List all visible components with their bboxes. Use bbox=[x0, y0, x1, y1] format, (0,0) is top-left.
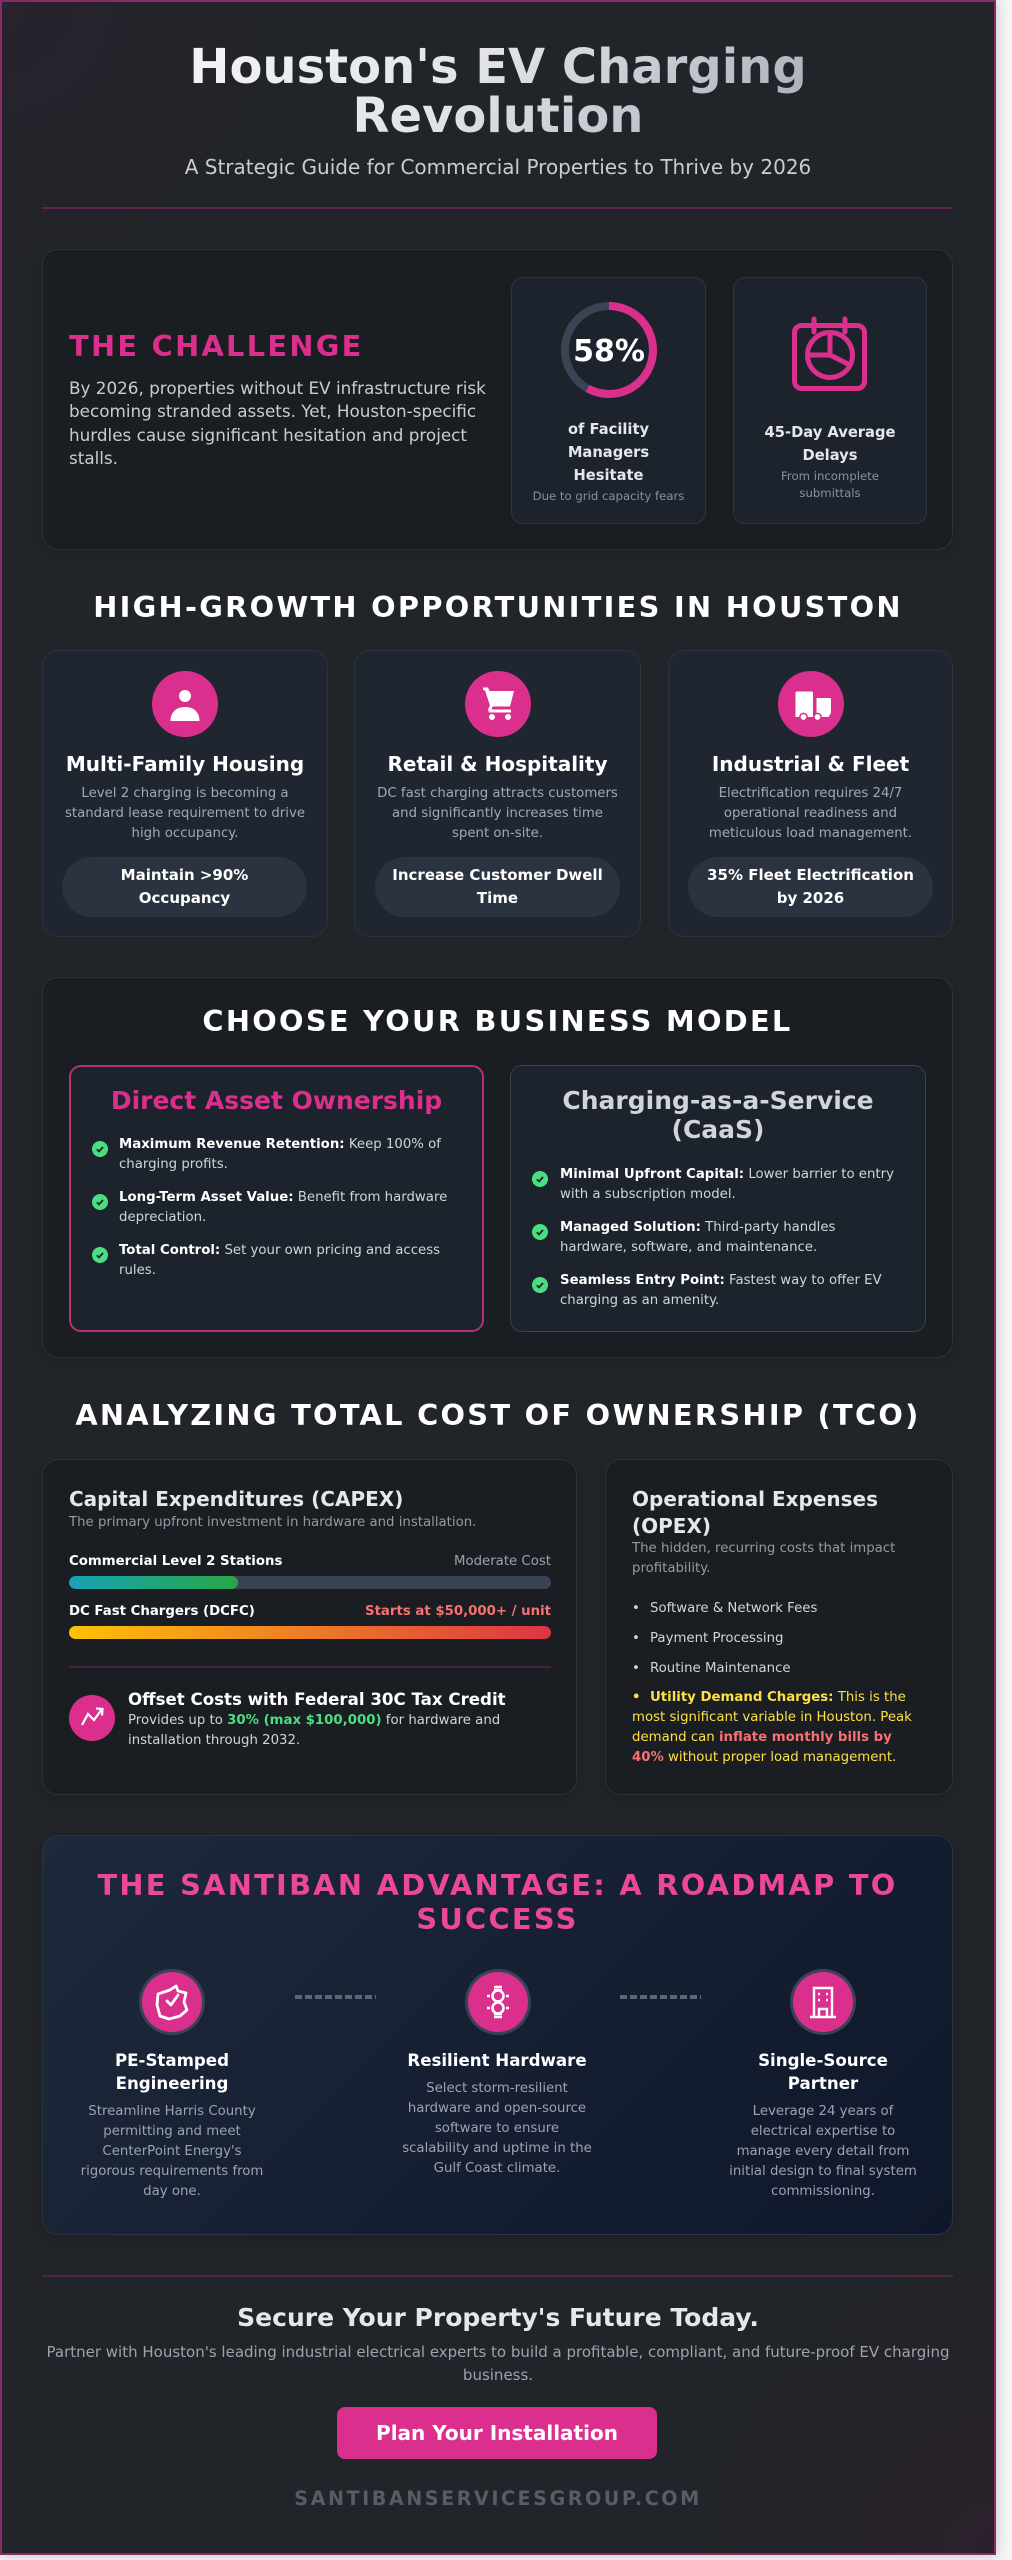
card: retail and hospitality bbox=[354, 650, 641, 937]
benefit text: charging as an amenity. bbox=[560, 1293, 719, 1308]
step 1 text: day one. bbox=[143, 2184, 201, 2199]
check icon bbox=[92, 1247, 108, 1263]
stat card: 45-day delays bbox=[733, 277, 927, 524]
card text: Level 2 charging is becoming a bbox=[81, 786, 289, 801]
stat label: Hesitate bbox=[574, 466, 643, 484]
OPEX subtitle: profitability. bbox=[632, 1561, 710, 1576]
stat label: 45-Day Average bbox=[765, 424, 895, 441]
OPEX title: Operational Expenses bbox=[632, 1486, 878, 1510]
check icon bbox=[92, 1141, 108, 1157]
card text: meticulous load management. bbox=[709, 826, 912, 841]
section heading: opportunities: HIGH-GROWTH OPPORTUNITIES IN HOUSTON bbox=[93, 590, 903, 624]
step 1 title: Engineering bbox=[116, 2074, 228, 2093]
list item: software fees bbox=[632, 1600, 817, 1616]
list item: maintenance: • bbox=[632, 1660, 640, 1676]
check icon bbox=[532, 1224, 548, 1240]
challenge text: By 2026, properties without EV infrastructure risk bbox=[69, 378, 486, 398]
footer text bbox=[0, 2340, 996, 2386]
header divider bbox=[42, 207, 953, 209]
step 1 text: rigorous requirements from bbox=[81, 2164, 263, 2179]
bar track and fill bbox=[69, 1626, 551, 1639]
step 2 text bbox=[402, 2081, 592, 2176]
step 2 text: software to ensure bbox=[435, 2121, 559, 2136]
step 1 text: CenterPoint Energy's bbox=[102, 2144, 242, 2159]
footer divider bbox=[42, 2275, 953, 2277]
list item: utility demand charges: demand can inflate monthly bills by bbox=[632, 1730, 892, 1745]
stat card: 58 percent bbox=[511, 277, 706, 524]
card title: Multi-Family Housing bbox=[66, 752, 304, 776]
call to action button: Plan Your Installation bbox=[376, 2421, 618, 2445]
OPEX subtitle: The hidden, recurring costs that impact bbox=[632, 1541, 895, 1556]
panel: choose your business model bbox=[42, 977, 953, 1358]
step 3 text: initial design to final system bbox=[729, 2164, 917, 2179]
donut chart: 58%: 58% bbox=[573, 334, 645, 369]
step icon: shield check bbox=[142, 1972, 202, 2032]
benefit text: hardware, software, and maintenance. bbox=[560, 1240, 817, 1255]
card: multi-family housing bbox=[42, 650, 328, 937]
stat note bbox=[781, 469, 879, 500]
challenge text bbox=[69, 378, 486, 468]
step 3 text bbox=[713, 2102, 933, 2202]
panel: the challenge bbox=[42, 249, 953, 550]
callout title: Offset Costs with Federal 30C Tax Credit bbox=[128, 1690, 506, 1709]
list item: utility demand charges: • bbox=[632, 1690, 640, 1705]
benefit text bbox=[560, 1220, 835, 1255]
benefit pill bbox=[375, 857, 620, 917]
bar value: Moderate Cost bbox=[454, 1554, 551, 1569]
step 2 text: hardware and open-source bbox=[408, 2101, 586, 2116]
benefit text: with a subscription model. bbox=[560, 1187, 736, 1202]
benefit text bbox=[119, 1190, 447, 1225]
CAPEX title: Capital Expenditures (CAPEX) bbox=[69, 1486, 403, 1510]
benefit pill: Increase Customer Dwell bbox=[392, 866, 603, 884]
OPEX subtitle bbox=[632, 1541, 895, 1576]
card text: Electrification requires 24/7 bbox=[719, 786, 902, 801]
icon: person bbox=[152, 671, 218, 737]
step 3 text: electrical expertise to bbox=[751, 2124, 895, 2139]
step 2 text: scalability and uptime in the bbox=[402, 2141, 592, 2156]
bar label: DC Fast Chargers (DCFC) bbox=[69, 1604, 255, 1619]
step 3 title: Single-Source bbox=[758, 2051, 888, 2070]
step 2 text: Select storm-resilient bbox=[426, 2081, 568, 2096]
benefit text bbox=[560, 1167, 894, 1202]
stat label: Delays bbox=[803, 447, 857, 464]
benefit text: rules. bbox=[119, 1263, 156, 1278]
benefit text: Long-Term Asset Value: Benefit from hardware bbox=[119, 1190, 447, 1205]
benefit text bbox=[560, 1273, 882, 1308]
roadmap heading bbox=[97, 1868, 898, 1936]
model title: Charging-as-a-Service bbox=[562, 1086, 874, 1114]
challenge text: becoming stranded assets. Yet, Houston-specific bbox=[69, 401, 476, 421]
benefit pill bbox=[688, 857, 933, 917]
title bbox=[189, 39, 807, 144]
stat label: of Facility bbox=[568, 420, 649, 438]
step 1 text bbox=[81, 2104, 263, 2199]
step 1 title: PE-Stamped bbox=[115, 2051, 229, 2070]
check icon bbox=[532, 1171, 548, 1187]
model title: Direct Asset Ownership bbox=[111, 1086, 442, 1114]
stat note: submittals bbox=[799, 486, 861, 500]
CAPEX divider bbox=[69, 1666, 551, 1668]
list item: utility demand charges: Utility Demand Charges: This is the bbox=[650, 1690, 906, 1705]
stat label bbox=[765, 424, 895, 464]
model card: charging as a service bbox=[510, 1065, 926, 1332]
panel: OPEX: Payment Processing bbox=[650, 1630, 783, 1646]
step 3 text: Leverage 24 years of bbox=[753, 2104, 893, 2119]
callout text: installation through 2032. bbox=[128, 1733, 300, 1748]
benefit list bbox=[92, 1137, 447, 1278]
connector bbox=[620, 1995, 701, 1999]
list item: utility demand charges: most significant variable in Houston. Peak bbox=[632, 1710, 912, 1725]
stat label bbox=[568, 420, 649, 484]
card text: operational readiness and bbox=[724, 806, 897, 821]
bar label: Commercial Level 2 Stations bbox=[69, 1554, 282, 1569]
benefit pill: 35% Fleet Electrification bbox=[707, 866, 914, 884]
icon: delivery truck bbox=[778, 671, 844, 737]
subtitle: A Strategic Guide for Commercial Properties to Thrive by 2026 bbox=[185, 155, 811, 179]
step icon: building bbox=[793, 1972, 853, 2032]
step 3 title bbox=[758, 2051, 888, 2093]
model title: (CaaS) bbox=[672, 1114, 764, 1144]
roadmap heading: THE SANTIBAN ADVANTAGE: A ROADMAP TO bbox=[97, 1868, 898, 1902]
step 3 title: Partner bbox=[788, 2074, 858, 2093]
benefit text: depreciation. bbox=[119, 1210, 206, 1225]
benefit text: Minimal Upfront Capital: Lower barrier to entry bbox=[560, 1167, 894, 1182]
bar: level 2 stations bbox=[69, 1554, 551, 1589]
challenge text: stalls. bbox=[69, 448, 118, 468]
list item: utility demand charges bbox=[632, 1690, 912, 1765]
panel: CAPEX bbox=[42, 1459, 577, 1795]
callout text bbox=[128, 1713, 500, 1748]
step 3 text: commissioning. bbox=[771, 2184, 875, 2199]
check icon bbox=[92, 1194, 108, 1210]
title: Houston's EV Charging bbox=[189, 39, 807, 95]
tax credit callout bbox=[69, 1690, 506, 1748]
list item: payment processing: • bbox=[632, 1630, 640, 1646]
call to action button bbox=[337, 2407, 657, 2459]
card text bbox=[377, 786, 618, 841]
challenge text: hurdles cause significant hesitation and project bbox=[69, 425, 467, 445]
card text: spent on-site. bbox=[452, 826, 543, 841]
benefit text: Total Control: Set your own pricing and access bbox=[119, 1243, 440, 1258]
list item: payment processing bbox=[632, 1630, 783, 1646]
model title bbox=[562, 1086, 874, 1144]
check icon bbox=[532, 1277, 548, 1293]
card text: high occupancy. bbox=[132, 826, 238, 841]
stat note: Due to grid capacity fears bbox=[533, 489, 684, 503]
roadmap heading: SUCCESS bbox=[416, 1902, 579, 1936]
step 1 title bbox=[115, 2051, 229, 2093]
panel: OPEX: Software & Network Fees bbox=[650, 1600, 817, 1616]
card text: standard lease requirement to drive bbox=[65, 806, 305, 821]
card title: Industrial & Fleet bbox=[712, 752, 909, 776]
benefit pill: Time bbox=[477, 888, 518, 906]
card: industrial and fleet bbox=[668, 650, 953, 937]
benefit text: Managed Solution: Third-party handles bbox=[560, 1220, 835, 1235]
callout text: Provides up to 30% (max $100,000) for hardware and bbox=[128, 1713, 500, 1728]
connector bbox=[295, 1995, 376, 1999]
benefit text: Maximum Revenue Retention: Keep 100% of bbox=[119, 1137, 441, 1152]
footer text: business. bbox=[463, 2366, 533, 2384]
benefit text bbox=[119, 1243, 440, 1278]
list item: software fees: • bbox=[632, 1600, 640, 1616]
card text bbox=[709, 786, 912, 841]
icon: shopping cart bbox=[464, 671, 530, 737]
bar: DC fast chargers bbox=[69, 1604, 551, 1639]
stat label: Managers bbox=[568, 444, 649, 460]
benefit pill: by 2026 bbox=[777, 888, 844, 906]
donut chart: 58% bbox=[561, 302, 657, 398]
benefit text bbox=[119, 1137, 442, 1172]
benefit pill: Maintain >90% bbox=[121, 866, 248, 884]
website: SANTIBANSERVICESGROUP.COM bbox=[294, 2487, 702, 2510]
benefit text: Seamless Entry Point: Fastest way to offer EV bbox=[560, 1273, 882, 1288]
step icon: resilient hardware bbox=[468, 1972, 528, 2032]
benefit pill bbox=[62, 857, 307, 917]
step 1 text: Streamline Harris County bbox=[88, 2104, 256, 2119]
benefit text: charging profits. bbox=[119, 1157, 228, 1172]
OPEX title: (OPEX) bbox=[632, 1514, 711, 1538]
step 2 title: Resilient Hardware bbox=[407, 2051, 587, 2070]
card text: DC fast charging attracts customers bbox=[377, 786, 618, 801]
step 3 text: manage every detail from bbox=[737, 2144, 909, 2159]
icon: trending up bbox=[69, 1695, 115, 1741]
panel: OPEX bbox=[605, 1459, 953, 1795]
panel: the Santiban advantage bbox=[42, 1835, 953, 2235]
model card: direct asset ownership bbox=[69, 1065, 484, 1332]
benefit pill: Occupancy bbox=[139, 888, 230, 906]
section heading: CHOOSE YOUR BUSINESS MODEL bbox=[202, 1004, 793, 1038]
step 2 text: Gulf Coast climate. bbox=[434, 2161, 560, 2176]
stat note: From incomplete bbox=[781, 469, 879, 483]
section heading: TCO: ANALYZING TOTAL COST OF OWNERSHIP (TCO) bbox=[75, 1398, 921, 1432]
OPEX title bbox=[632, 1486, 878, 1538]
card text: and significantly increases time bbox=[392, 806, 603, 821]
list item: utility demand charges: 40% without proper load management. bbox=[632, 1750, 896, 1765]
challenge heading: THE CHALLENGE bbox=[69, 329, 364, 363]
icon: calendar with clock bbox=[792, 316, 867, 391]
footer heading: Secure Your Property's Future Today. bbox=[237, 2303, 759, 2332]
footer text: Partner with Houston's leading industrial electrical experts to build a profitable, compliant, and future-proof EV charging bbox=[46, 2342, 949, 2360]
step 1 text: permitting and meet bbox=[103, 2124, 241, 2139]
card text bbox=[65, 786, 305, 841]
title: Revolution bbox=[353, 88, 643, 144]
list item: maintenance bbox=[632, 1660, 791, 1676]
bar value: Starts at $50,000+ / unit bbox=[365, 1604, 551, 1619]
card title: Retail & Hospitality bbox=[387, 752, 608, 776]
benefit list bbox=[532, 1167, 894, 1308]
panel: OPEX: Routine Maintenance bbox=[650, 1660, 791, 1676]
bar track and fill bbox=[69, 1576, 551, 1589]
CAPEX subtitle: The primary upfront investment in hardware and installation. bbox=[69, 1514, 476, 1530]
